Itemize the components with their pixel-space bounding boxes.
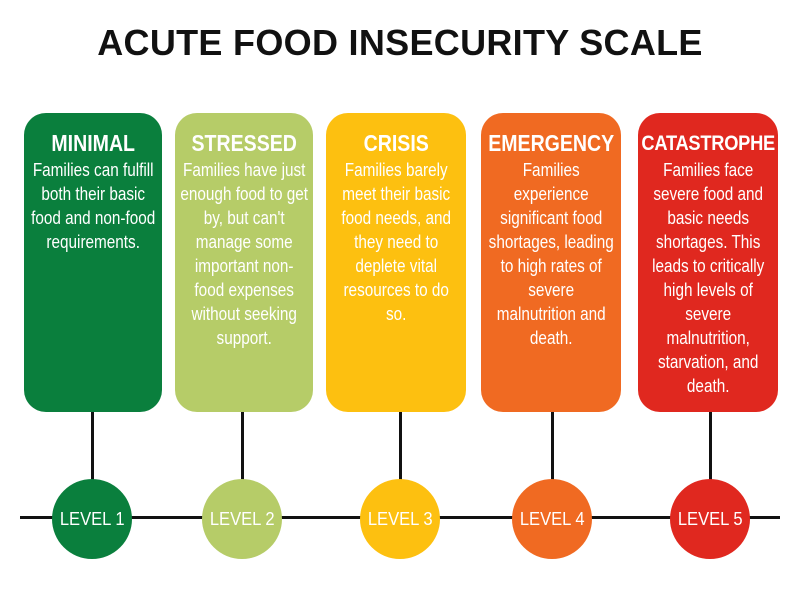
panel: stressed: enough food to get — [180, 184, 308, 204]
connector 1 — [91, 412, 94, 482]
panel: crisis: deplete vital — [355, 256, 437, 276]
panel: minimal: requirements. — [46, 232, 140, 252]
connector 4 — [551, 412, 554, 482]
circle: level 1: LEVEL 1 — [60, 509, 124, 529]
panel: catastrophe: severe — [685, 304, 731, 324]
panel: catastrophe — [638, 113, 778, 412]
panel: catastrophe: high levels of — [664, 280, 753, 300]
panel: stressed: manage some — [196, 232, 293, 252]
panel: stressed: support. — [217, 328, 272, 348]
panel: emergency: malnutrition and — [497, 304, 606, 324]
panel: catastrophe: basic needs — [667, 208, 749, 228]
panel: catastrophe: death. — [687, 376, 729, 396]
panel: emergency: Families — [523, 160, 580, 180]
panel: emergency: experience — [514, 184, 589, 204]
panel: catastrophe: leads to critically — [652, 256, 764, 276]
panel: catastrophe: malnutrition, — [667, 328, 750, 348]
circle: level 3: LEVEL 3 — [368, 509, 432, 529]
panel: crisis: meet their basic — [342, 184, 450, 204]
circle: level 2 — [202, 479, 282, 559]
circle: level 5 — [670, 479, 750, 559]
panel: crisis — [326, 113, 466, 412]
panel: emergency: significant food — [500, 208, 602, 228]
panel: stressed: food expenses — [194, 280, 294, 300]
panel: stressed: Families have just — [183, 160, 305, 180]
panel: catastrophe: starvation, and — [658, 352, 758, 372]
panel: catastrophe: severe food and — [653, 184, 763, 204]
panel: emergency — [481, 113, 621, 412]
panel: minimal: both their basic — [41, 184, 145, 204]
timeline line — [20, 516, 780, 519]
panel: catastrophe: Families face — [663, 160, 753, 180]
panel: stressed — [175, 113, 313, 412]
panel: crisis: so. — [386, 304, 406, 324]
panel: crisis: Families barely — [345, 160, 448, 180]
panel: minimal: Families can fulfill — [33, 160, 154, 180]
circle: level 4: LEVEL 4 — [520, 509, 584, 529]
panel: catastrophe: CATASTROPHE — [641, 131, 775, 155]
panel: stressed: by, but can't — [204, 208, 285, 228]
panel: crisis: food needs, and — [341, 208, 451, 228]
circle: level 1 — [52, 479, 132, 559]
circle: level 5: LEVEL 5 — [678, 509, 742, 529]
panel: minimal: food and non-food — [31, 208, 155, 228]
panel: stressed: important non- — [195, 256, 294, 276]
panel: catastrophe: shortages. This — [656, 232, 760, 252]
panel: crisis: resources to do — [343, 280, 449, 300]
circle: level 2: LEVEL 2 — [210, 509, 274, 529]
panel: emergency: death. — [530, 328, 572, 348]
panel: crisis: they need to — [354, 232, 438, 252]
panel: crisis: CRISIS — [364, 130, 429, 156]
connector 2 — [241, 412, 244, 482]
panel: emergency: severe — [528, 280, 574, 300]
connector 5 — [709, 412, 712, 482]
panel: minimal: MINIMAL — [51, 130, 135, 156]
title: ACUTE FOOD INSECURITY SCALE — [97, 22, 703, 63]
panel: emergency: to high rates of — [501, 256, 602, 276]
panel: stressed: without seeking — [191, 304, 297, 324]
panel: minimal — [24, 113, 162, 412]
panel: stressed: STRESSED — [192, 130, 297, 156]
panel: emergency: shortages, leading — [489, 232, 614, 252]
circle: level 4 — [512, 479, 592, 559]
circle: level 3 — [360, 479, 440, 559]
connector 3 — [399, 412, 402, 482]
panel: emergency: EMERGENCY — [488, 130, 614, 156]
